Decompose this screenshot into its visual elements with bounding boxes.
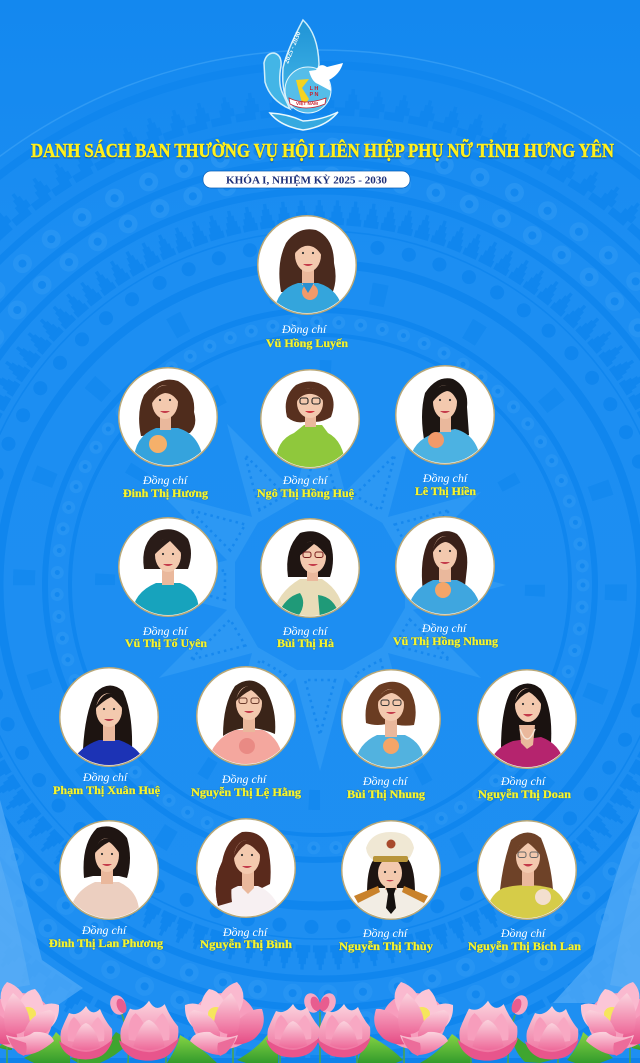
label: Vũ Hồng Luyến: Đồng chí [281, 322, 328, 336]
label: Bùi Thị Hà: Bùi Thị Hà [277, 636, 334, 650]
label: Lê Thị Hiền [415, 471, 476, 498]
logo: banner: VIỆT NAM [296, 99, 318, 106]
logo: upper wing [283, 20, 319, 108]
label: Nguyễn Thị Doan [478, 774, 571, 801]
portrait: Đinh Thị Lan Phương [59, 820, 159, 920]
portrait: Lê Thị Hiền [395, 365, 495, 465]
logo: year: 2025 - 2030 [282, 30, 303, 65]
stems [7, 1012, 630, 1063]
label: Đinh Thị Lan Phương [49, 923, 163, 950]
label: Nguyễn Thị Bình: Đồng chí [222, 925, 269, 939]
flowers [0, 982, 59, 1056]
label: Lê Thị Hiền: Lê Thị Hiền [415, 484, 476, 498]
logo: globe: P N [309, 92, 319, 98]
label: Nguyễn Thị Bình: Nguyễn Thị Bình [200, 937, 292, 951]
logo: globe [285, 67, 331, 113]
portrait: Nguyễn Thị Bình [196, 818, 296, 920]
logo: globe: L H [310, 86, 318, 92]
label: Vũ Thị Tố Uyên: Vũ Thị Tố Uyên [125, 636, 207, 650]
portrait: Phạm Thị Xuân Huệ [59, 667, 159, 773]
label: Vũ Thị Hồng Nhung: Vũ Thị Hồng Nhung [393, 634, 498, 648]
portrait: Bùi Thị Hà [260, 518, 360, 619]
label: Vũ Thị Hồng Nhung: Đồng chí [421, 621, 468, 635]
label: Nguyễn Thị Bình [200, 925, 292, 951]
label: Vũ Thị Hồng Nhung [393, 621, 498, 648]
label: Vũ Hồng Luyến [266, 322, 348, 350]
label: Nguyễn Thị Bích Lan [468, 926, 581, 953]
portrait: Nguyễn Thị Bích Lan [477, 820, 577, 920]
bottom strip [0, 1058, 640, 1063]
label: Đinh Thị Hương: Đinh Thị Hương [123, 486, 208, 500]
label: Bùi Thị Hà [277, 624, 334, 650]
label: Nguyễn Thị Lệ Hằng: Đồng chí [221, 772, 268, 786]
label: Nguyễn Thị Lệ Hằng: Nguyễn Thị Lệ Hằng [191, 785, 301, 799]
label: Nguyễn Thị Thùy: Nguyễn Thị Thùy [339, 939, 433, 953]
label: Đinh Thị Lan Phương: Đinh Thị Lan Phương [49, 936, 163, 950]
label: Phạm Thị Xuân Huệ: Phạm Thị Xuân Huệ [53, 783, 161, 797]
label: Nguyễn Thị Bích Lan: Nguyễn Thị Bích Lan [468, 939, 581, 953]
label: Bùi Thị Nhung [347, 774, 425, 801]
portrait: Ngô Thị Hồng Huệ [260, 369, 360, 469]
label: Nguyễn Thị Bích Lan: Đồng chí [500, 926, 547, 940]
label: Nguyễn Thị Doan: Nguyễn Thị Doan [478, 787, 571, 801]
label: Vũ Thị Tố Uyên: Đồng chí [142, 624, 189, 638]
label: Đinh Thị Lan Phương: Đồng chí [81, 923, 128, 937]
label: Đinh Thị Hương: Đồng chí [142, 473, 189, 487]
label: Phạm Thị Xuân Huệ [53, 770, 161, 797]
portrait: Vũ Thị Hồng Nhung [395, 516, 495, 616]
label: Nguyễn Thị Lệ Hằng [191, 772, 301, 799]
logo [264, 20, 343, 130]
label: Bùi Thị Hà: Đồng chí [282, 624, 329, 638]
label: Ngô Thị Hồng Huệ: Ngô Thị Hồng Huệ [257, 486, 355, 500]
portrait: Vũ Thị Tố Uyên [118, 517, 218, 617]
subtitle pill [203, 171, 410, 188]
label: Nguyễn Thị Thùy [339, 926, 433, 953]
logo: hands [270, 112, 338, 130]
portrait: Bùi Thị Nhung [341, 669, 441, 769]
label: Lê Thị Hiền: Đồng chí [422, 471, 469, 485]
label: Vũ Thị Tố Uyên [125, 624, 207, 650]
subtitle pill: KHÓA I, NHIỆM KỲ 2025 - 2030 [226, 174, 388, 186]
portrait: Nguyễn Thị Lệ Hằng [196, 666, 296, 766]
portrait: Nguyễn Thị Doan [477, 669, 577, 769]
portrait: Đinh Thị Hương [118, 367, 218, 467]
portrait: Vũ Hồng Luyến [257, 215, 357, 318]
lotus border [0, 982, 640, 1063]
label: Bùi Thị Nhung: Bùi Thị Nhung [347, 787, 425, 801]
label: Bùi Thị Nhung: Đồng chí [362, 774, 409, 788]
logo: left wing [264, 53, 290, 109]
label: Đinh Thị Hương [123, 473, 208, 500]
label: Ngô Thị Hồng Huệ: Đồng chí [282, 473, 329, 487]
label: Phạm Thị Xuân Huệ: Đồng chí [82, 770, 129, 784]
label: Nguyễn Thị Thùy: Đồng chí [362, 926, 409, 940]
portrait: Nguyễn Thị Thùy [341, 820, 441, 920]
label: Vũ Hồng Luyến: Vũ Hồng Luyến [266, 336, 348, 350]
label: Nguyễn Thị Doan: Đồng chí [500, 774, 547, 788]
label: Ngô Thị Hồng Huệ [257, 473, 355, 500]
leaves [0, 1032, 640, 1063]
buds [108, 993, 128, 1017]
logo: dove [309, 63, 343, 91]
